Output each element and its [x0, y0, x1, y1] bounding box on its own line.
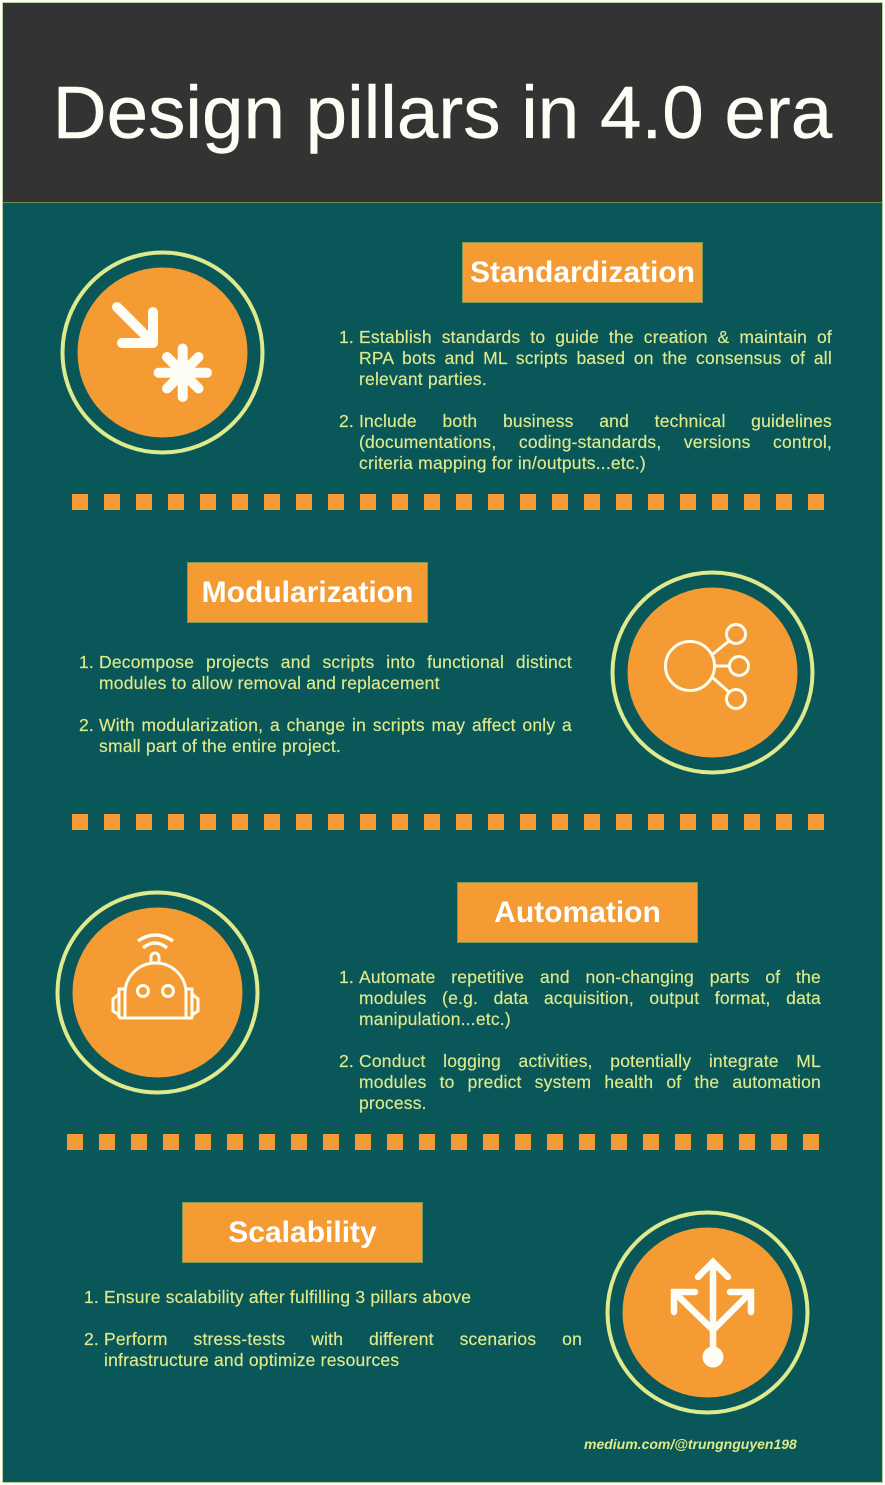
text: automation list	[339, 967, 821, 1113]
icon: automation badge	[56, 890, 260, 1094]
divider dots	[72, 814, 824, 830]
text: automation list: manipulation...etc.)	[359, 1009, 511, 1029]
text: scalability list: 2.	[84, 1329, 99, 1349]
text: automation list: modules to predict system health of the automation	[359, 1072, 821, 1092]
text: standardization list: relevant parties.	[359, 369, 487, 389]
text: modularization list: 1.	[79, 652, 94, 672]
text: standardization list: (documentations, coding-standards, versions control,	[359, 432, 832, 452]
text: automation list: 1.	[339, 967, 354, 987]
text: automation list: Automate repetitive and non-changing parts of the	[359, 967, 821, 987]
text: automation list: Conduct logging activities, potentially integrate ML	[359, 1051, 821, 1071]
text: modularization list: Decompose projects and scripts into functional distinct	[99, 652, 572, 672]
text: modularization list: With modularization, a change in scripts may affect only a	[99, 715, 572, 735]
icon: modularization badge	[610, 570, 814, 774]
text: standardization list	[339, 327, 832, 473]
heading: Scalability: Scalability	[228, 1216, 377, 1249]
text: standardization list: RPA bots and ML scripts based on the consensus of all	[359, 348, 832, 368]
header band with title	[3, 3, 882, 203]
icon dot	[702, 1346, 724, 1368]
text: standardization list: criteria mapping for in/outputs...etc.)	[359, 453, 646, 473]
icon: scalability badge	[606, 1210, 810, 1414]
text: standardization list: Include both business and technical guidelines	[359, 411, 832, 431]
text: modularization list	[79, 652, 572, 756]
text: scalability list: Perform stress-tests with different scenarios on	[104, 1329, 582, 1349]
text: automation list: modules (e.g. data acquisition, output format, data	[359, 988, 821, 1008]
heading: Standardization	[462, 242, 703, 303]
icon: standardization badge	[60, 250, 264, 454]
heading: Scalability	[182, 1202, 423, 1263]
divider dots	[67, 1134, 819, 1150]
heading: Modularization	[187, 562, 428, 623]
source credit: medium.com/@trungnguyen198	[584, 1436, 797, 1452]
text: scalability list: infrastructure and optimize resources	[104, 1350, 399, 1370]
title: Design pillars in 4.0 era	[53, 70, 832, 154]
text: scalability list	[84, 1287, 582, 1370]
text: standardization list: 1.	[339, 327, 354, 347]
divider dots	[72, 494, 824, 510]
heading: Standardization: Standardization	[470, 256, 695, 289]
text: modularization list: 2.	[79, 715, 94, 735]
text: modularization list: modules to allow removal and replacement	[99, 673, 440, 693]
text: scalability list: 1.	[84, 1287, 99, 1307]
heading: Modularization: Modularization	[202, 576, 413, 609]
heading: Automation: Automation	[494, 896, 661, 929]
text: automation list: process.	[359, 1093, 427, 1113]
text: automation list: 2.	[339, 1051, 354, 1071]
text: modularization list: small part of the entire project.	[99, 736, 341, 756]
heading: Automation	[457, 882, 698, 943]
text: scalability list: Ensure scalability after fulfilling 3 pillars above	[104, 1287, 471, 1307]
text: standardization list: 2.	[339, 411, 354, 431]
text: standardization list: Establish standards to guide the creation & maintain of	[359, 327, 832, 347]
